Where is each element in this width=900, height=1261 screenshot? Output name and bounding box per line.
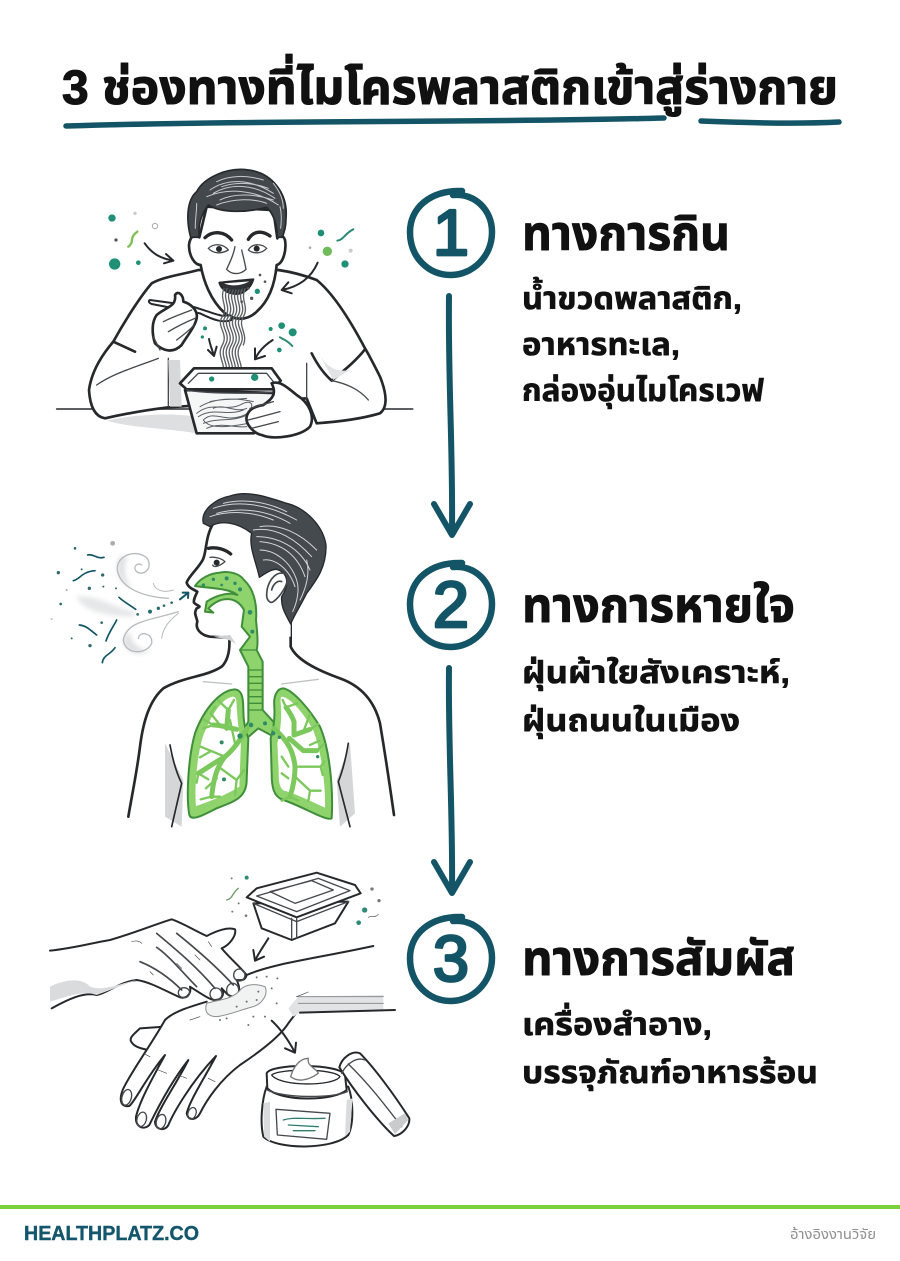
step 3 heading: ทางการสัมผัส (522, 933, 795, 986)
cream smear (206, 985, 266, 1017)
smoke swirls (77, 554, 178, 654)
step 2 heading: ทางการหายใจ (522, 580, 795, 633)
particles in airway (202, 576, 319, 781)
step 2 number (410, 563, 492, 647)
hand on bowl (246, 383, 312, 437)
step 1 description: อาหารทะเล, (522, 327, 680, 362)
left lung (188, 689, 248, 818)
eyes and brows (205, 232, 270, 240)
step 1 description (522, 276, 765, 409)
step 1 description: กล่องอุ่นไมโครเวฟ (522, 373, 765, 409)
step 1 description: น้ำขวดพลาสติก, (522, 276, 742, 316)
illustration: inhalation into lungs (51, 494, 394, 827)
table line (57, 406, 413, 411)
right lung (271, 688, 332, 819)
step 3 number (410, 917, 492, 1001)
green airway (195, 572, 288, 740)
mouth (219, 279, 253, 294)
jar lid (339, 1053, 409, 1136)
noodles (220, 288, 245, 386)
step 1 heading: ทางการกิน (522, 208, 730, 261)
illustration: man eating noodles (57, 169, 413, 437)
arrows toward the man (145, 243, 318, 359)
ear eye brow (267, 573, 287, 602)
body outline (128, 638, 229, 817)
brand: HEALTHPLATZ.CO (24, 1223, 199, 1245)
bronchial tree left (198, 710, 247, 797)
arrow 2 to 3 (434, 668, 470, 893)
step 2 number: 2 (433, 568, 469, 641)
food container (253, 902, 348, 940)
microplastic particles (108, 212, 353, 382)
title: 3 ช่องทางที่ไมโครพลาสติกเข้าสู่ร่างกาย (62, 54, 838, 117)
footer bar (0, 1205, 900, 1209)
fork and hand (149, 300, 232, 321)
step 2 description: ฝุ่นถนนในเมือง (522, 703, 740, 739)
upper hand (50, 919, 247, 1008)
step 1 number (410, 191, 492, 275)
step 3 description (522, 1002, 818, 1091)
particles near container (227, 876, 381, 925)
arrow: container to skin (253, 938, 268, 961)
step 2 description (522, 655, 790, 739)
head profile (187, 523, 291, 638)
step 2 description: ฝุ่นผ้าใยสังเคราะห์, (522, 655, 790, 691)
source note: อ้างอิงงานวิจัย (790, 1226, 876, 1242)
shirt and arms (89, 270, 386, 423)
step 3 description: เครื่องสำอาง, (522, 1002, 712, 1042)
lower hand (131, 1027, 165, 1050)
face (189, 207, 285, 319)
airborne particles (51, 541, 188, 663)
arrow 1 to 2 (434, 296, 470, 535)
arrow: skin to jar (272, 1021, 296, 1053)
hair (188, 169, 286, 237)
step 3 description: บรรจุภัณฑ์อาหารร้อน (522, 1055, 818, 1091)
step 3 number: 3 (433, 922, 469, 995)
cream jar (262, 1058, 353, 1146)
bowl (185, 390, 282, 433)
step 1 number: 1 (433, 196, 469, 269)
hair (203, 494, 326, 624)
bronchial tree right (274, 707, 317, 797)
illustration: skin contact (50, 873, 409, 1146)
